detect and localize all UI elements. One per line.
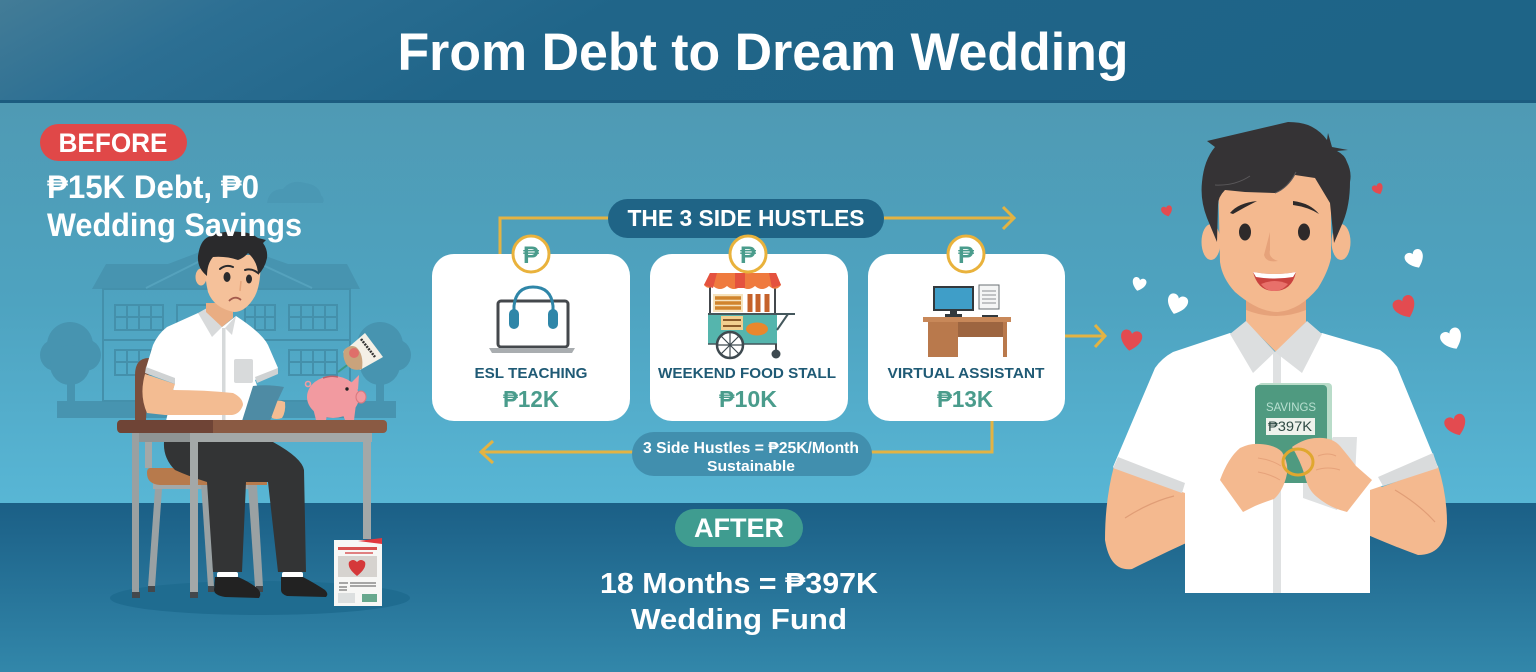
collar xyxy=(1230,321,1322,373)
placket and pocket xyxy=(1273,352,1357,593)
card: weekend food stall xyxy=(650,254,848,421)
background school building and trees xyxy=(40,182,411,418)
chair xyxy=(135,358,267,592)
floor shadow xyxy=(110,581,410,615)
savings book: ₱397K xyxy=(1268,418,1313,434)
eyes and brows xyxy=(1230,201,1319,240)
savings book: SAVINGS xyxy=(1266,400,1316,414)
icon: peso coin 2 xyxy=(730,236,766,272)
heading pill: the 3 side hustles xyxy=(608,199,884,238)
ears xyxy=(1202,224,1350,260)
background wall xyxy=(0,103,1536,503)
face xyxy=(1218,170,1331,312)
wedding ring xyxy=(1283,449,1313,475)
trousers xyxy=(164,442,306,572)
card: ESL teaching xyxy=(432,254,630,421)
icon: peso coin 3: ₱ xyxy=(958,242,975,269)
hands xyxy=(1220,444,1287,512)
head xyxy=(196,232,267,327)
background floor xyxy=(0,503,1536,672)
desk xyxy=(117,420,387,598)
summary pill xyxy=(632,432,872,476)
after result text xyxy=(600,568,878,636)
worried student at desk xyxy=(110,232,410,615)
shirt collar, placket, pocket xyxy=(145,308,278,420)
smile xyxy=(1253,272,1296,291)
icon: peso coin 2: ₱ xyxy=(740,242,757,269)
title: From Debt to Dream Wedding xyxy=(398,23,1128,82)
after result text: 18 Months = ₱397K xyxy=(600,568,878,600)
amount: ₱10K xyxy=(719,386,777,412)
label: ESL TEACHING xyxy=(474,365,588,382)
wedding magazine on floor xyxy=(334,538,382,606)
summary pill: 3 Side Hustles = ₱25K/Month xyxy=(643,440,859,457)
before badge xyxy=(40,124,187,161)
icon: desk with computer xyxy=(923,285,1011,357)
icon: peso coin 1: ₱ xyxy=(523,242,540,269)
icon: food cart xyxy=(704,273,795,358)
socks and shoes xyxy=(214,572,327,598)
piggy bank with bill xyxy=(306,333,383,420)
card: virtual assistant xyxy=(868,254,1065,421)
before status text xyxy=(47,169,302,243)
neck xyxy=(1246,295,1306,352)
before status text: ₱15K Debt, ₱0 xyxy=(47,169,259,205)
sleeve cuffs xyxy=(1113,453,1438,493)
after result text: Wedding Fund xyxy=(631,604,847,636)
amount: ₱13K xyxy=(937,386,993,412)
header band xyxy=(0,0,1536,103)
hair xyxy=(1202,122,1351,243)
hair highlights xyxy=(1215,172,1296,193)
icon: laptop with headphones xyxy=(489,287,575,353)
nose xyxy=(1264,232,1278,261)
savings book xyxy=(1255,383,1332,483)
icon: peso coin 3 xyxy=(948,236,984,272)
after badge xyxy=(675,509,803,547)
amount: ₱12K xyxy=(503,386,559,412)
after badge: AFTER xyxy=(694,513,784,543)
finger lines xyxy=(1258,454,1340,480)
shirt xyxy=(1113,333,1438,593)
summary pill: Sustainable xyxy=(707,458,795,475)
arm and hands xyxy=(142,374,243,415)
flow arrows xyxy=(481,207,1105,463)
label: VIRTUAL ASSISTANT xyxy=(888,365,1044,382)
heading pill: the 3 side hustles: THE 3 SIDE HUSTLES xyxy=(628,205,864,231)
arms xyxy=(1105,458,1262,569)
happy student holding savings book xyxy=(1105,122,1470,593)
before badge: BEFORE xyxy=(58,128,168,158)
label: WEEKEND FOOD STALL xyxy=(658,365,836,382)
arm creases xyxy=(1125,490,1435,522)
icon: peso coin 1 xyxy=(513,236,549,272)
before status text: Wedding Savings xyxy=(47,207,302,243)
hearts xyxy=(1119,182,1470,439)
tablet xyxy=(242,385,284,421)
shirt xyxy=(146,313,278,421)
